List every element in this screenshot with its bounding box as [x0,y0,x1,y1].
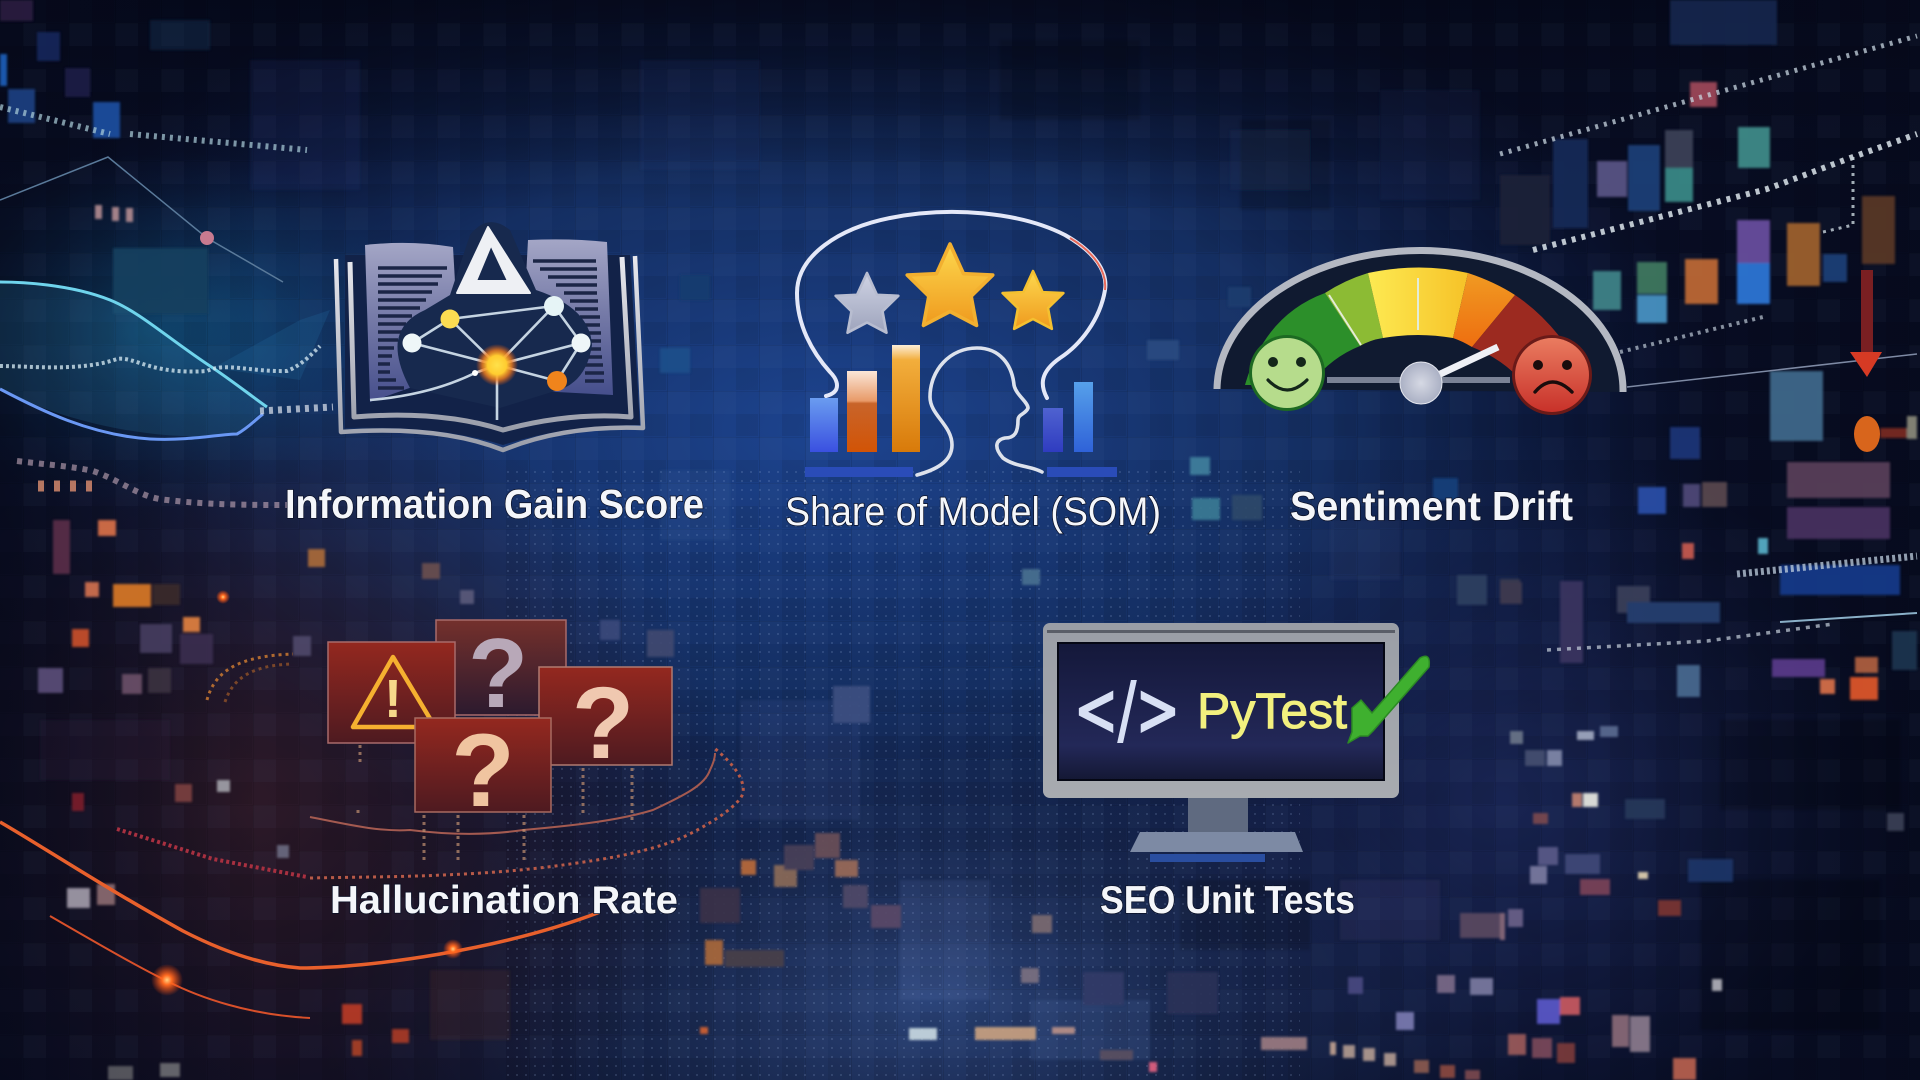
sign: question right [539,666,672,780]
sign: question right: ? [572,666,634,780]
stars [836,244,1063,333]
delta triangle [457,227,530,293]
monitor frame [1043,623,1399,798]
label: Hallucination Rate: Hallucination Rate [330,879,678,922]
label: Sentiment Drift: Sentiment Drift [1290,483,1573,529]
icon: monitor with PyTest [1043,623,1429,862]
bar baselines [805,467,1117,477]
bars [810,345,1093,452]
label: Share of Model (SOM): Share of Model (SOM) [785,490,1161,534]
sign: question back [436,618,566,728]
gauge silver rim [1217,251,1623,392]
label: Information Gain Score: Information Gain Score [285,481,704,527]
central dark shape [398,222,592,408]
sign: question front: ? [451,713,515,829]
gauge colour bands [1245,268,1590,385]
right page [520,239,613,395]
thought bubble outline [797,212,1105,398]
head silhouette [917,348,1042,475]
sign: warning [328,642,455,743]
sign: warning: ! [384,669,402,729]
sign: question front [415,713,551,829]
icon: sentiment gauge [1217,251,1623,415]
gauge dark base [1217,251,1623,392]
code symbol: </> [1074,667,1180,753]
needle [1421,347,1498,383]
PyTest text: PyTest [1197,683,1347,739]
label: SEO Unit Tests: SEO Unit Tests [1100,879,1355,922]
sad face [1512,335,1592,415]
left page [365,243,460,402]
book cover outline [336,256,643,450]
smiley face [1249,335,1325,411]
needle hub [1400,362,1442,404]
needle track [1327,377,1510,383]
icon: book with knowledge graph [336,222,643,450]
monitor stand [1188,798,1248,832]
monitor screen [1058,643,1384,780]
green check mark [1348,656,1429,743]
icon: share of model [797,212,1117,477]
icon: warning and question signs [328,618,672,860]
graph nodes [402,296,590,391]
graph edges [370,306,581,420]
text lines on pages [378,261,604,388]
sign: question back: ? [468,618,528,728]
